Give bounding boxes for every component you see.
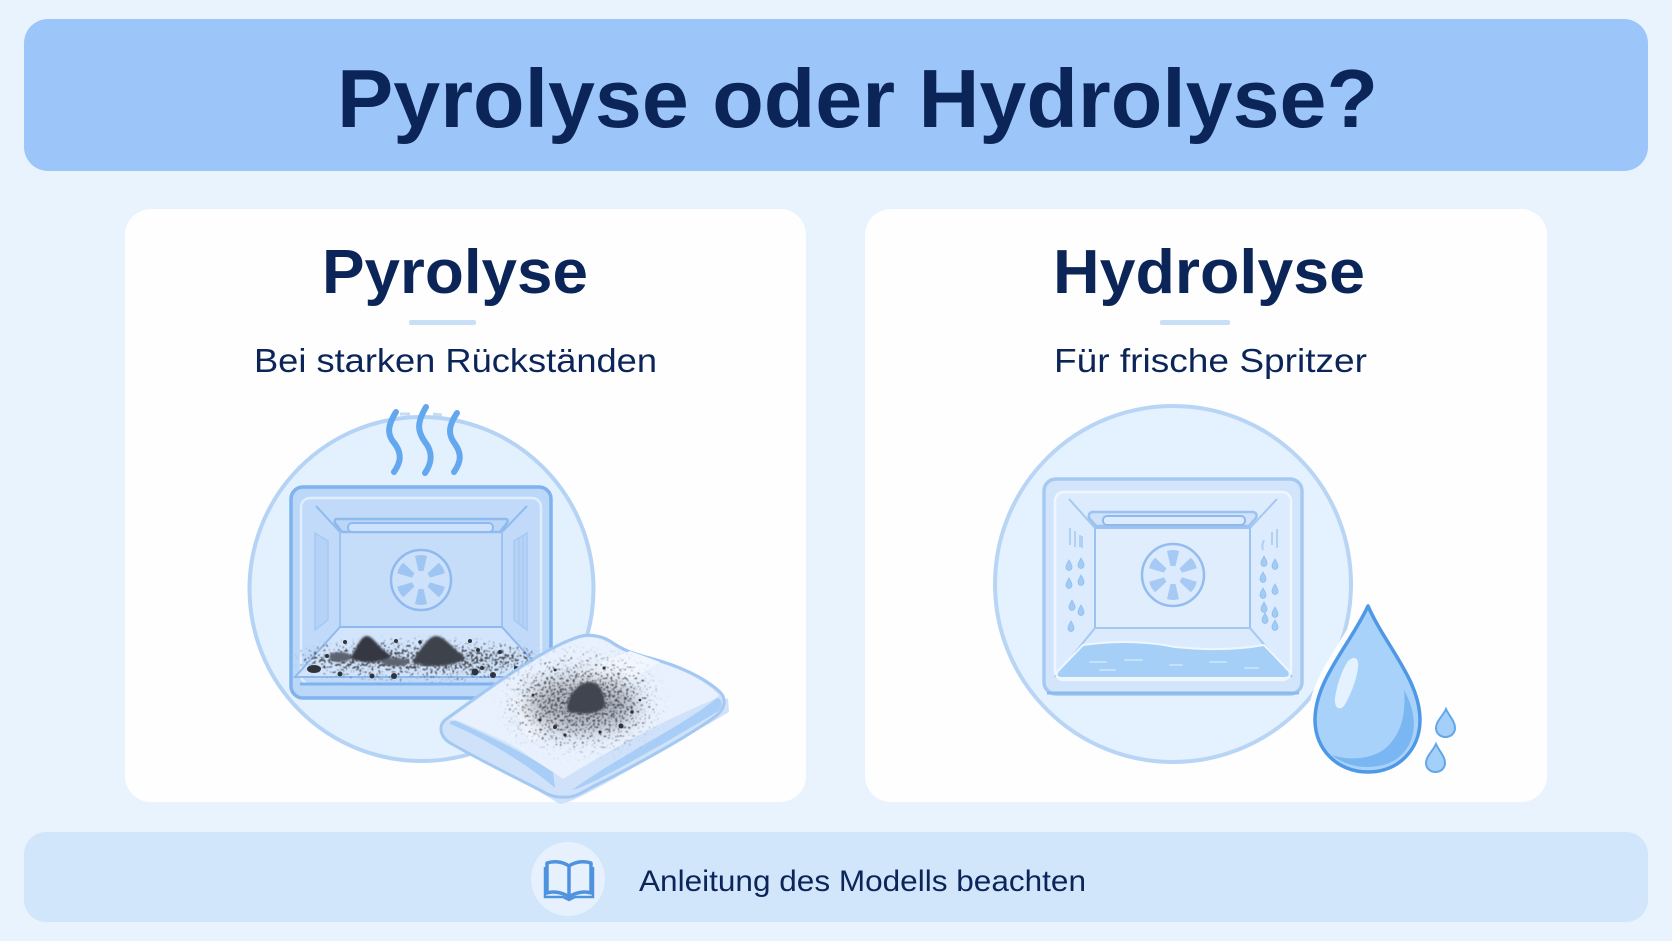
footer note: Anleitung des Modells beachten <box>639 865 1086 898</box>
icon: small water drop <box>1426 744 1445 772</box>
illustration: background circle <box>250 417 594 761</box>
illustration: soiled cloth <box>441 635 729 804</box>
subtitle: Für frische Spritzer: Für frische Spritzer <box>1054 342 1367 379</box>
icon: heat waves <box>378 406 465 473</box>
divider <box>409 320 476 325</box>
heading: Hydrolyse: Hydrolyse <box>1053 238 1365 307</box>
icon: open book <box>531 842 605 916</box>
footer bar <box>24 832 1648 922</box>
condensation droplets on oven walls <box>1066 528 1278 632</box>
subtitle: Bei starken Rückständen: Bei starken Rückständen <box>254 342 657 379</box>
title banner <box>24 19 1648 171</box>
oven heater bar <box>1089 512 1257 526</box>
soot on oven floor <box>302 636 538 679</box>
oven fan <box>391 550 451 610</box>
icon: small water drop <box>1436 709 1455 737</box>
oven heater bar <box>335 519 508 532</box>
water on oven floor <box>1057 642 1290 678</box>
illustration: background circle <box>995 406 1351 762</box>
icon: large water drop <box>1315 606 1420 772</box>
oven fan <box>1142 544 1204 606</box>
illustration: oven with water <box>1044 479 1302 694</box>
panel: Hydrolyse <box>865 209 1547 802</box>
heading: Pyrolyse: Pyrolyse <box>322 238 588 307</box>
soot on cloth <box>520 666 644 737</box>
title: Pyrolyse oder Hydrolyse? <box>337 52 1378 145</box>
panel: Pyrolyse <box>125 209 806 804</box>
divider <box>1160 320 1230 325</box>
illustration: oven with soot <box>291 487 551 698</box>
